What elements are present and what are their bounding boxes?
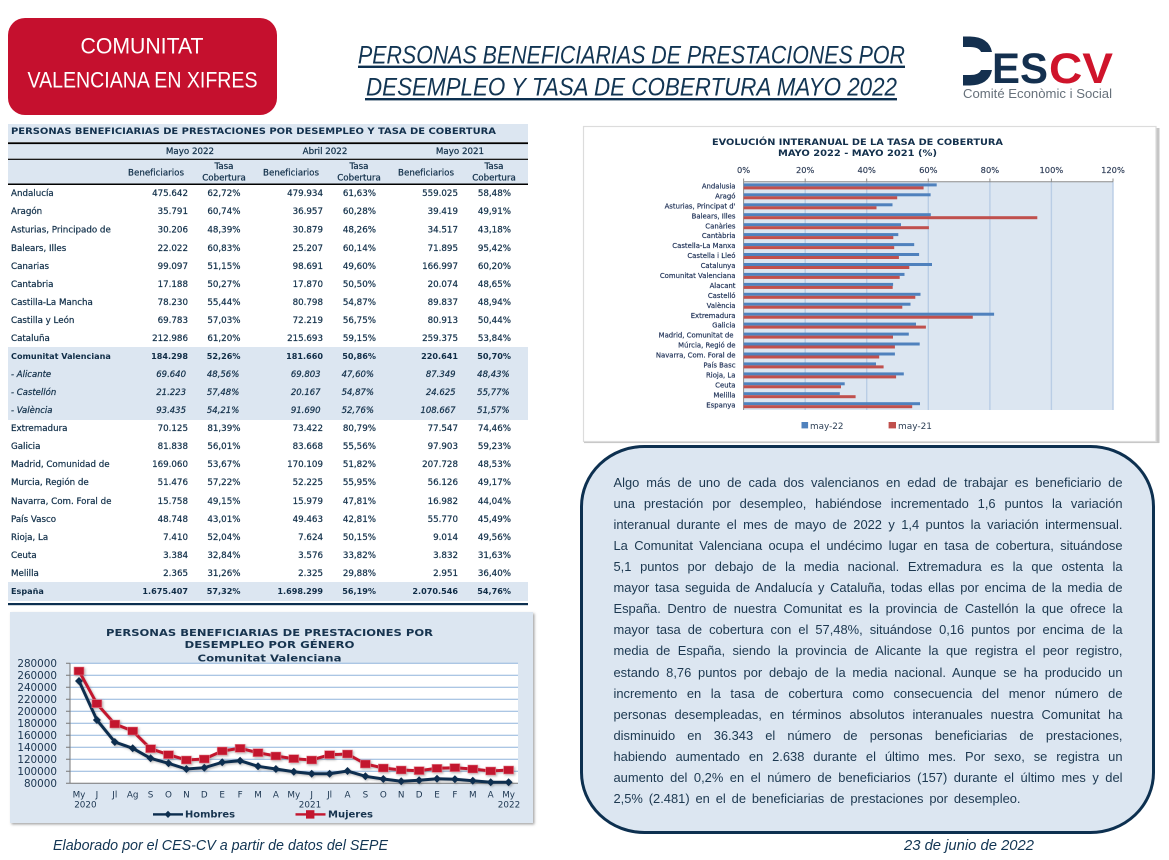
text block: summary paragraph: 2,5% (2.481) en el de beneficiarias de prestaciones por desempleo. xyxy=(614,791,1020,806)
table rows: 57,22% xyxy=(207,478,240,488)
table rows: 52,76% xyxy=(342,406,374,416)
table rows: 49,60% xyxy=(343,262,376,272)
table rows: 25.207 xyxy=(293,244,323,254)
table rows: 3.384 xyxy=(163,551,188,561)
title xyxy=(358,42,905,101)
table rows: 54,87% xyxy=(343,298,376,308)
table rows: 24.625 xyxy=(426,388,456,398)
table title: PERSONAS BENEFICIARIAS DE PRESTACIONES POR DESEMPLEO Y TASA DE COBERTURA xyxy=(11,127,496,137)
table rows: 169.060 xyxy=(152,460,188,470)
table rows: 55.770 xyxy=(428,515,458,525)
table rows: 31,26% xyxy=(207,569,240,579)
table rows: 78.230 xyxy=(158,298,188,308)
text block: summary paragraph: España. Dentro de nuestra Comunitat es la provincia de Castellón la que ofrece la xyxy=(614,601,1122,616)
table rows: 99.097 xyxy=(158,262,188,272)
table column headers: Cobertura xyxy=(337,173,381,183)
text block: summary paragraph: incremento en la tasa de cobertura como consecuencia del menor número de xyxy=(614,686,1122,701)
table rows: 51,15% xyxy=(207,262,240,272)
x axis labels: O xyxy=(165,790,172,800)
table rows: 166.997 xyxy=(422,262,458,272)
table rows: 33,82% xyxy=(343,551,376,561)
table rows: 51,57% xyxy=(477,406,510,416)
text block: summary paragraph: media de España, siendo la provincia de Alicante la que registra el peor registro, xyxy=(614,643,1122,658)
table rows: 55,56% xyxy=(343,442,376,452)
y axis labels: 240000 xyxy=(17,682,57,694)
table rows: 55,77% xyxy=(477,388,510,398)
table rows: 48,65% xyxy=(478,280,511,290)
table rows: 54,87% xyxy=(342,388,374,398)
bar chart region labels: Extremadura xyxy=(691,312,736,320)
table rows: Castilla y León xyxy=(11,315,74,326)
logo: CES-CV: Comité Econòmic i Social xyxy=(963,86,1112,101)
x axis labels: My xyxy=(287,790,300,800)
table rows: 2.951 xyxy=(433,569,458,579)
bar chart region labels: Espanya xyxy=(706,401,736,409)
table rows: 2.070.546 xyxy=(412,586,458,596)
line chart title: DESEMPLEO POR GÉNERO xyxy=(184,638,354,651)
line chart legend: Hombres xyxy=(185,810,235,821)
bar chart percent axis: 80% xyxy=(981,165,999,175)
table rows: 56.126 xyxy=(428,478,458,488)
source note: Elaborado por el CES-CV a partir de datos del SEPE xyxy=(53,838,388,854)
table rows: 1.675.407 xyxy=(142,586,188,596)
table rows: 70.125 xyxy=(158,424,188,434)
x axis labels: M xyxy=(254,790,262,800)
table rows: 207.728 xyxy=(422,460,458,470)
table rows: España xyxy=(11,586,44,596)
table rows: 50,44% xyxy=(478,316,511,326)
table rows: 47,60% xyxy=(342,370,374,380)
table rows: 9.014 xyxy=(433,533,458,543)
table rows: 59,15% xyxy=(343,334,376,344)
bar chart percent axis: 100% xyxy=(1040,165,1063,175)
y axis labels: 280000 xyxy=(17,658,57,670)
logo: CES-CV: CV xyxy=(1049,45,1113,93)
panel: data table xyxy=(8,124,528,605)
table rows: 60,28% xyxy=(343,207,376,217)
panel: bar chart of coverage rate xyxy=(584,126,1160,443)
y axis labels: 80000 xyxy=(24,778,57,790)
table rows: 80.913 xyxy=(428,316,458,326)
table rows: 80.798 xyxy=(293,298,323,308)
table rows: 52,04% xyxy=(207,533,240,543)
table rows: 50,15% xyxy=(343,533,376,543)
table rows: 57,03% xyxy=(207,316,240,326)
table rows: Balears, Illes xyxy=(11,244,67,254)
table rows: Canarias xyxy=(11,262,50,272)
table rows: 20.074 xyxy=(428,280,458,290)
bar chart region labels: Aragó xyxy=(715,192,736,200)
x axis labels: 2022 xyxy=(498,800,520,810)
y axis labels: 120000 xyxy=(17,754,57,766)
table rows: 15.979 xyxy=(293,497,323,507)
table rows: 49.463 xyxy=(293,515,323,525)
table rows: - Alicante xyxy=(11,370,51,380)
table rows: 42,81% xyxy=(343,515,376,525)
table rows: Cataluña xyxy=(11,334,50,344)
table rows: 29,88% xyxy=(343,569,376,579)
table rows: 57,32% xyxy=(207,586,240,596)
text block: summary paragraph: 5,1 puntos por debajo de la media nacional. Extremadura es la que ostenta la xyxy=(614,559,1122,574)
table rows xyxy=(11,189,511,596)
table rows: 170.109 xyxy=(287,460,323,470)
bar chart region labels: Melilla xyxy=(713,391,736,399)
x axis labels: F xyxy=(238,790,243,800)
table column headers: Beneficiarios xyxy=(398,169,454,179)
bar chart legend xyxy=(802,422,932,432)
y axis labels: 100000 xyxy=(17,766,57,778)
table rows: 20.167 xyxy=(291,388,321,398)
table rows: 53,84% xyxy=(478,334,511,344)
table column headers: Beneficiarios xyxy=(128,169,184,179)
table rows: 89.837 xyxy=(428,298,458,308)
table rows: 184.298 xyxy=(151,351,188,361)
table rows: Melilla xyxy=(11,569,39,579)
series: Mujeres xyxy=(74,667,514,775)
table rows: 49,91% xyxy=(478,207,511,217)
bar chart region labels: Castella i Lleó xyxy=(687,252,736,260)
table rows: 30.879 xyxy=(293,226,323,236)
table rows: 35.791 xyxy=(158,207,188,217)
y axis labels: 160000 xyxy=(17,730,57,742)
table rows: 30.206 xyxy=(158,226,188,236)
title: DESEMPLEO Y TASA DE COBERTURA MAYO 2022 xyxy=(366,74,897,101)
bar chart percent axis: 60% xyxy=(919,165,938,175)
logo: CES-CV: ES xyxy=(992,45,1048,93)
x axis labels: 2021 xyxy=(299,800,321,810)
bar chart region labels: Rioja, La xyxy=(706,372,736,380)
table rows: 475.642 xyxy=(152,189,188,199)
x axis labels: N xyxy=(183,790,190,800)
table rows: 48.748 xyxy=(158,515,188,525)
table rows: 69.803 xyxy=(291,370,321,380)
bar chart region labels: Cantàbria xyxy=(702,232,736,240)
x axis labels: M xyxy=(469,790,477,800)
line chart legend: Mujeres xyxy=(328,810,373,821)
bar chart region labels: País Basc xyxy=(703,362,736,370)
table rows: 50,27% xyxy=(207,280,240,290)
table rows: 49,17% xyxy=(478,478,511,488)
date note: 23 de junio de 2022 xyxy=(903,838,1034,854)
line chart legend xyxy=(153,810,373,821)
x axis labels: S xyxy=(363,790,369,800)
bar chart percent axis: 40% xyxy=(857,165,876,175)
y axis labels: 180000 xyxy=(17,718,57,730)
table rows: Murcia, Región de xyxy=(11,477,89,488)
bar chart region labels: Galicia xyxy=(712,322,736,330)
table rows: 50,70% xyxy=(477,351,511,361)
table rows: 3.576 xyxy=(298,551,323,561)
bar chart region labels: Asturias, Principat d' xyxy=(665,202,736,210)
badge: Comunitat Valenciana en xifres xyxy=(8,18,277,115)
table rows: 62,72% xyxy=(207,189,240,199)
table rows: 1.698.299 xyxy=(277,586,323,596)
table rows: 31,63% xyxy=(478,551,511,561)
bar chart region labels: Catalunya xyxy=(701,262,736,270)
x axis labels: J xyxy=(309,790,313,800)
line chart title: Comunitat Valenciana xyxy=(198,654,342,664)
table rows: Aragón xyxy=(11,206,42,217)
bars: may-21 xyxy=(744,186,1037,408)
bar chart percent axis xyxy=(737,165,1125,175)
table rows: Andalucía xyxy=(11,189,54,199)
table rows: - Castellón xyxy=(11,387,56,398)
text block: summary paragraph: habiendo aumentado en 2.638 durante el último mes. Por sexo, se registra un xyxy=(614,749,1122,764)
table rows: 181.660 xyxy=(286,351,323,361)
table rows: 47,81% xyxy=(343,497,376,507)
table rows: 98.691 xyxy=(293,262,323,272)
bar chart region labels: Comunitat Valenciana xyxy=(660,272,736,280)
text block: summary paragraph: interanual durante el mes de mayo de 2022 y 1,4 puntos la variación intermensual. xyxy=(614,517,1122,532)
table rows: 48,26% xyxy=(343,226,376,236)
table rows: 83.668 xyxy=(293,442,323,452)
line chart title: PERSONAS BENEFICIARIAS DE PRESTACIONES POR xyxy=(106,628,433,639)
title: PERSONAS BENEFICIARIAS DE PRESTACIONES POR xyxy=(358,42,905,69)
table rows: 50,86% xyxy=(342,351,376,361)
bar chart percent axis: 20% xyxy=(796,165,815,175)
table rows: 61,63% xyxy=(343,189,376,199)
table rows: 73.422 xyxy=(293,424,323,434)
table rows: 48,56% xyxy=(207,370,239,380)
table rows: 97.903 xyxy=(428,442,458,452)
bar chart region labels: Canàries xyxy=(705,222,736,230)
badge: Comunitat Valenciana en xifres: COMUNITAT xyxy=(80,34,204,58)
bar chart region labels: Castelló xyxy=(708,292,736,300)
table rows: 34.517 xyxy=(428,226,458,236)
bars: may-22 xyxy=(744,183,994,405)
panel: line chart by gender xyxy=(10,612,533,823)
table rows: 58,48% xyxy=(478,189,511,199)
x axis labels: F xyxy=(452,790,457,800)
table rows: 2.365 xyxy=(163,569,188,579)
x axis labels: Jl xyxy=(111,790,117,800)
table rows: País Vasco xyxy=(11,515,56,525)
bar chart region labels: Castella-La Manxa xyxy=(672,242,736,250)
table rows: 54,21% xyxy=(207,406,239,416)
text block: summary paragraph: mayor tasa seguida de Andalucía y Cataluña, todas ellas por encima de la media de xyxy=(614,580,1122,595)
x axis labels: D xyxy=(416,790,423,800)
table rows: - València xyxy=(11,405,52,416)
table column headers: Cobertura xyxy=(472,173,516,183)
table rows: 49,15% xyxy=(207,497,240,507)
table rows: 55,44% xyxy=(207,298,240,308)
table rows: 2.325 xyxy=(298,569,323,579)
table rows: Madrid, Comunidad de xyxy=(11,460,110,470)
table rows: 71.895 xyxy=(428,244,458,254)
table rows: 95,42% xyxy=(478,244,511,254)
table rows: 60,83% xyxy=(207,244,240,254)
table rows: 56,19% xyxy=(342,586,376,596)
line chart title xyxy=(106,628,433,664)
bar chart region labels: Ceuta xyxy=(715,381,736,389)
bar chart percent axis: 120% xyxy=(1101,165,1125,175)
table rows: 36.957 xyxy=(293,207,323,217)
table rows: 7.410 xyxy=(163,533,188,543)
table rows: 60,20% xyxy=(478,262,511,272)
bar chart region labels: Balears, Illes xyxy=(692,212,736,220)
table rows: 50,50% xyxy=(343,280,376,290)
table rows: 52,26% xyxy=(207,351,240,361)
y axis labels: 140000 xyxy=(17,742,57,754)
table column headers: Cobertura xyxy=(202,173,246,183)
x axis labels: D xyxy=(201,790,208,800)
table rows: Galicia xyxy=(11,442,40,452)
x axis labels: O xyxy=(380,790,387,800)
table rows: 81,39% xyxy=(207,424,240,434)
table rows: 15.758 xyxy=(158,497,188,507)
table rows: Castilla-La Mancha xyxy=(11,298,93,308)
y axis labels xyxy=(17,658,57,790)
text block: summary paragraph: una prestación por desempleo, habiéndose incrementado 1,6 puntos la variación xyxy=(614,496,1122,511)
text block: summary paragraph: estando 8,76 puntos por debajo de la media nacional. Aunque se ha producido un xyxy=(614,665,1122,680)
table rows: 32,84% xyxy=(207,551,240,561)
x axis labels: S xyxy=(148,790,154,800)
table rows: 212.986 xyxy=(152,334,188,344)
bar chart region labels: Navarra, Com. Foral de xyxy=(656,352,736,360)
table rows: 56,01% xyxy=(207,442,240,452)
x axis labels: 2020 xyxy=(74,800,97,810)
bar chart title xyxy=(712,136,1003,159)
table rows: 39.419 xyxy=(428,207,458,217)
x axis labels: My xyxy=(502,790,515,800)
logo: CES-CV xyxy=(963,36,1113,101)
bar chart region labels: Madrid, Comunitat de xyxy=(659,332,734,340)
x axis labels: E xyxy=(219,790,225,800)
table rows: Cantabria xyxy=(11,280,53,290)
bar chart region labels xyxy=(656,182,736,409)
table column headers: Abril 2022 xyxy=(303,147,347,157)
table rows: 74,46% xyxy=(478,424,511,434)
table rows: Navarra, Com. Foral de xyxy=(11,497,111,507)
table rows: 48,39% xyxy=(207,226,240,236)
x axis labels: E xyxy=(434,790,440,800)
y axis labels: 200000 xyxy=(17,706,57,718)
table rows: Rioja, La xyxy=(11,533,48,543)
table column headers: Tasa xyxy=(483,162,504,172)
table rows: 51,82% xyxy=(343,460,376,470)
table rows: Extremadura xyxy=(11,424,67,434)
x axis labels: J xyxy=(95,790,98,800)
table rows: 479.934 xyxy=(287,189,323,199)
table rows: 3.832 xyxy=(433,551,458,561)
table rows: Comunitat Valenciana xyxy=(11,351,111,361)
table rows: 52.225 xyxy=(293,478,323,488)
x axis labels: Jl xyxy=(326,790,332,800)
table rows: 81.838 xyxy=(158,442,188,452)
table rows: 36,40% xyxy=(478,569,511,579)
text panel background xyxy=(582,446,1154,832)
table rows: 108.667 xyxy=(420,406,456,416)
table rows: 77.547 xyxy=(428,424,458,434)
table rows: 45,49% xyxy=(478,515,511,525)
table rows: 49,56% xyxy=(478,533,511,543)
table rows: 61,20% xyxy=(207,334,240,344)
table rows: 60,74% xyxy=(207,207,240,217)
table rows: 60,14% xyxy=(343,244,376,254)
text block: summary paragraph: disminuido en 36.343 el número de personas beneficiarias de prestaciones, xyxy=(614,728,1122,743)
table rows: 69.640 xyxy=(156,370,186,380)
y axis labels: 260000 xyxy=(17,670,57,682)
table rows: 17.870 xyxy=(293,280,323,290)
table rows: 43,01% xyxy=(207,515,240,525)
table rows: 53,67% xyxy=(207,460,240,470)
table rows: 93.435 xyxy=(156,406,186,416)
text block: summary paragraph: Algo más de uno de cada dos valencianos en edad de trabajar es beneficiario de xyxy=(614,475,1122,490)
table rows: 57,48% xyxy=(207,388,239,398)
table rows: 259.375 xyxy=(422,334,458,344)
text block: summary paragraph: La Comunitat Valenciana ocupa el undécimo lugar en tasa de cobertura, situándose xyxy=(614,538,1122,553)
bar chart region labels: València xyxy=(707,302,736,310)
x axis labels: A xyxy=(344,790,351,800)
table rows: 87.349 xyxy=(426,370,456,380)
x axis labels: A xyxy=(488,790,494,800)
table rows: 21.223 xyxy=(156,388,186,398)
text block: summary paragraph: personas desempleadas, en términos absolutos interanuales nuestra Comunitat ha xyxy=(614,707,1122,722)
x axis labels: Ag xyxy=(127,790,139,800)
x axis labels: My xyxy=(73,790,85,800)
table column headers: Beneficiarios xyxy=(263,169,319,179)
table rows: 51.476 xyxy=(158,478,188,488)
table column headers: Mayo 2022 xyxy=(166,147,214,157)
bar chart title: MAYO 2022 - MAYO 2021 (%) xyxy=(778,149,937,159)
table rows: 48,94% xyxy=(478,298,511,308)
table rows: 69.783 xyxy=(158,316,188,326)
table rows: 56,75% xyxy=(343,316,376,326)
table column headers: Tasa xyxy=(348,162,369,172)
table rows: 91.690 xyxy=(291,406,321,416)
badge: Comunitat Valenciana en xifres: VALENCIANA EN XIFRES xyxy=(28,68,258,93)
text block: summary paragraph: aumento del 0,2% en el número de beneficiarios (157) durante el último mes y del xyxy=(614,770,1122,785)
table rows: Asturias, Principado de xyxy=(11,226,111,236)
y axis labels: 220000 xyxy=(17,694,57,706)
table rows: Ceuta xyxy=(11,551,37,561)
bar chart region labels: Múrcia, Regió de xyxy=(678,342,736,350)
table column headers: Tasa xyxy=(213,162,234,172)
table rows: 22.022 xyxy=(158,244,188,254)
table rows: 54,76% xyxy=(477,586,511,596)
bar chart region labels: Alacant xyxy=(710,282,736,290)
text block: summary paragraph: mayor tasa de cobertura con el 57,48%, situándose 0,16 puntos por encima de la xyxy=(614,622,1122,637)
table column headers xyxy=(128,147,516,183)
table rows: 7.624 xyxy=(298,533,323,543)
bar chart percent axis: 0% xyxy=(737,165,750,175)
series: Hombres xyxy=(75,677,513,786)
x axis labels: A xyxy=(273,790,279,800)
table rows: 48,53% xyxy=(478,460,511,470)
x axis labels xyxy=(73,790,520,810)
table rows: 48,43% xyxy=(477,370,510,380)
table rows: 16.982 xyxy=(428,497,458,507)
table rows: 80,79% xyxy=(343,424,376,434)
text block: summary paragraph xyxy=(614,475,1123,806)
table rows: 72.219 xyxy=(293,316,323,326)
bar chart legend: may-22 xyxy=(810,422,844,432)
table rows: 43,18% xyxy=(478,226,511,236)
bar chart region labels: Andalusia xyxy=(702,182,736,190)
table rows: 559.025 xyxy=(422,189,458,199)
x axis labels: N xyxy=(398,790,404,800)
table rows: 44,04% xyxy=(478,497,511,507)
table column headers: Mayo 2021 xyxy=(436,147,484,157)
table rows: 55,95% xyxy=(343,478,376,488)
table rows: 59,23% xyxy=(478,442,511,452)
bar chart title: EVOLUCIÓN INTERANUAL DE LA TASA DE COBERTURA xyxy=(712,136,1003,148)
table rows: 215.693 xyxy=(287,334,323,344)
bar chart legend: may-21 xyxy=(898,422,932,432)
table rows: 220.641 xyxy=(421,351,458,361)
table rows: 17.188 xyxy=(158,280,188,290)
